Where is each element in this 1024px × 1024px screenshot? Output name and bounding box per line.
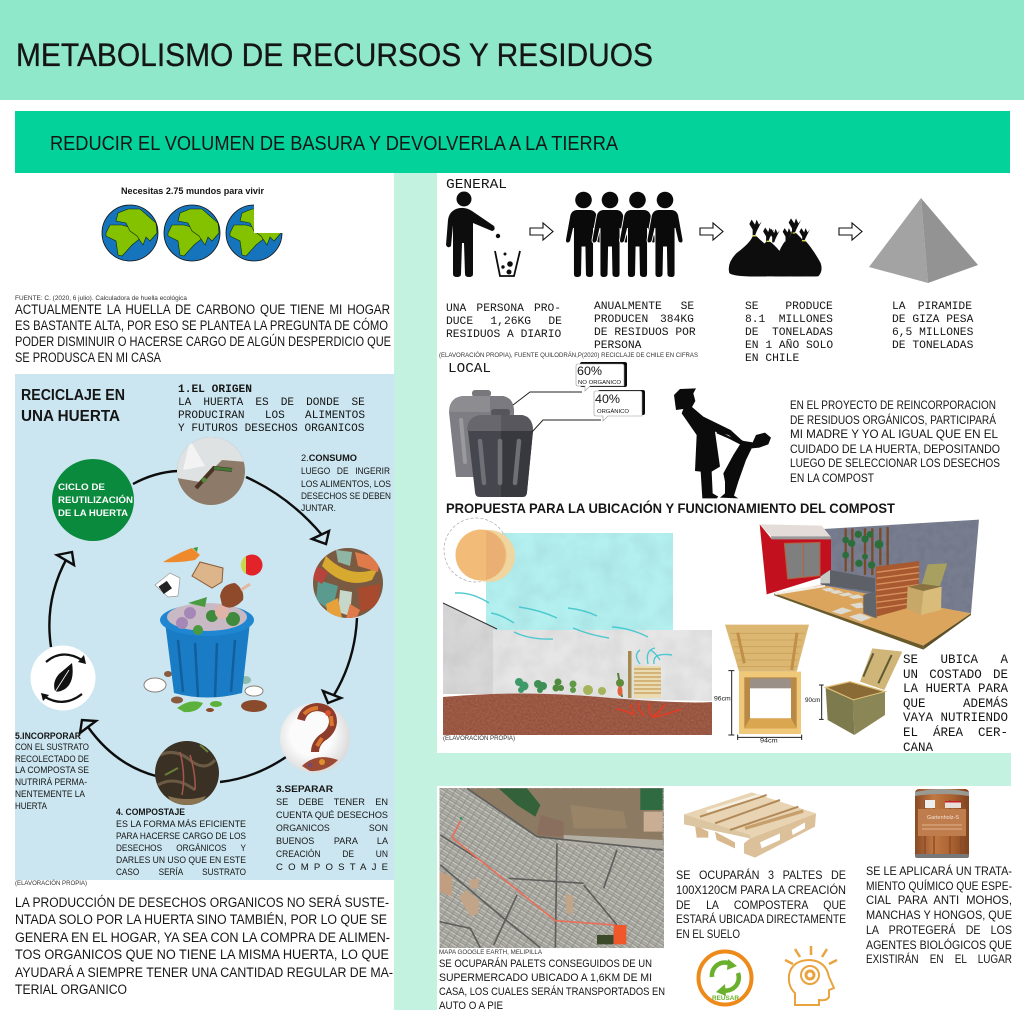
production paragraph: LA PRODUCCIÓN DE DESECHOS ORGANICOS NO SERÁ SUSTE- — [15, 894, 389, 911]
section: propuesta compost — [443, 499, 1009, 755]
icon: person throwing trash — [446, 192, 520, 277]
footprint paragraph: SE PRODUSCA EN MI CASA — [15, 350, 161, 365]
compost box front view — [714, 625, 809, 745]
fact 3 text: EN 1 AÑO SOLO — [745, 339, 833, 352]
cycle connector lines — [49, 471, 357, 782]
step 4 text: ES LA FORMA MÁS EFICIENTE — [116, 819, 246, 830]
step 3 text: 3.SEPARAR — [276, 784, 333, 795]
location text: CANA — [903, 741, 934, 755]
icon: trash cans — [449, 390, 533, 497]
local paragraph — [790, 398, 1000, 485]
step 4 text: DARLES UN USO QUE EN ESTE — [116, 855, 246, 866]
icon: wood treatment can: Gartenholz-S — [927, 815, 959, 821]
fact 3 text: EN CHILE — [745, 353, 799, 365]
air flow strokes — [455, 593, 672, 664]
title: METABOLISMO DE RECURSOS Y RESIDUOS — [16, 37, 653, 73]
production paragraph — [15, 894, 393, 998]
map caption: MAPA GOOGLE EARTH, MELIPILLA — [439, 949, 543, 956]
section: general — [439, 177, 978, 365]
callout: 40 percent: ORGÁNICO — [597, 408, 630, 415]
cycle arrowheads — [57, 531, 341, 733]
location text: LA HUERTA PARA — [903, 682, 1009, 696]
wood fence — [876, 561, 919, 617]
fact 4 text: DE TONELADAS — [892, 340, 974, 352]
icon: four people — [566, 192, 683, 278]
step 1 text: 1.EL ORIGEN — [178, 384, 252, 396]
fact 4 text: LA PIRAMIDE — [892, 301, 972, 313]
subtitle: REDUCIR EL VOLUMEN DE BASURA Y DEVOLVERLA A LA TIERRA — [50, 132, 618, 155]
callout: 60 percent — [576, 362, 627, 391]
source note: section drawing: (ELAVORACIÓN PROPIA) — [443, 735, 515, 742]
local heading: LOCAL — [448, 361, 491, 377]
panel: reciclaje en una huerta — [15, 374, 394, 880]
step 1 text: PRODUCIRAN LOS ALIMENTOS — [178, 410, 365, 422]
fact 1 text: RESIDUOS A DIARIO — [446, 329, 561, 341]
step 3 text: CREACIÓN DE UN — [276, 849, 388, 860]
delivery route — [452, 821, 615, 925]
compost bin section — [628, 651, 661, 698]
production paragraph: NTADA SOLO POR LA HUERTA SINO TAMBIÉN, POR LO QUE SE — [15, 911, 387, 928]
aerial map — [440, 788, 664, 948]
height dimension: 96cm — [714, 695, 731, 702]
location text: QUE ADEMÁS — [903, 696, 1008, 711]
3d garden render — [760, 520, 979, 650]
transport text: SE OCUPARÁN PALETS CONSEGUIDOS DE UN — [439, 957, 652, 970]
treatment text: MANCHAS Y HONGOS, QUE — [866, 908, 1012, 922]
step 4 text — [116, 807, 247, 878]
location text — [903, 653, 1009, 755]
icon: garbage bags — [729, 218, 822, 277]
treatment text — [866, 864, 1012, 966]
icon: wooden pallet — [684, 792, 816, 858]
source note: general: (ELAVORACIÓN PROPIA), FUENTE QUILODRÁN,P(2020) RECICLAJE DE CHILE EN CIFRAS — [439, 352, 698, 359]
arrow — [530, 223, 553, 240]
step 1 photo: garden — [177, 437, 247, 507]
top band — [0, 0, 1024, 100]
destination plot — [614, 925, 626, 944]
compost box in render — [922, 563, 947, 586]
panel heading: RECICLAJE EN — [21, 387, 125, 404]
green cycle badge: DE LA HUERTA — [58, 508, 128, 519]
step 3 text: SE DEBE TENER EN — [276, 797, 388, 808]
step 3 text: COMPOSTAJE — [276, 862, 388, 873]
panel: footprint — [15, 185, 391, 365]
pallet text: DE LA COMPOSTERA QUE — [676, 899, 846, 912]
green cycle badge: CICLO DE — [58, 482, 106, 493]
local paragraph: MI MADRE Y YO AL IGUAL QUE EN EL — [790, 427, 998, 441]
step 5 text: NUTRIRÁ PERMA- — [15, 777, 87, 788]
bucket body — [165, 622, 250, 698]
step 4 text: DESECHOS ORGÁNICOS Y — [116, 843, 247, 854]
step 2 text: DESECHOS SE DEBEN — [301, 491, 391, 502]
step 3 text — [276, 784, 389, 873]
vertical garden — [842, 527, 888, 575]
step 3 text: BUENOS PARA LA — [276, 836, 389, 847]
callout: 60 percent: NO ORGANICO — [578, 380, 622, 386]
transport text: SUPERMERCADO UBICADO A 1,6KM DE MI — [439, 972, 652, 984]
source note: panel: (ELAVORACIÓN PROPIA) — [15, 880, 87, 887]
location text: SE UBICA A — [903, 653, 1009, 667]
fact 4 text: DE GIZA PESA — [892, 314, 974, 326]
mint column background — [394, 173, 437, 1010]
icon: reuse badge — [698, 952, 752, 1004]
location text: UN COSTADO DE — [903, 668, 1008, 682]
step 1 text: LA HUERTA ES DE DONDE SE — [178, 397, 365, 409]
transport text: CASA, LOS CUALES SERÁN TRANSPORTADOS EN — [439, 985, 665, 998]
step 3 text: CUENTA QUÉ DESECHOS — [276, 810, 388, 821]
step 1 text — [178, 384, 365, 435]
footprint heading: Necesitas 2.75 mundos para vivir — [121, 185, 264, 196]
step 5 text: 5.INCORPORAR — [15, 731, 81, 742]
step 2 text: LOS ALIMENTOS, LOS — [301, 479, 391, 490]
step 5 text — [15, 731, 89, 812]
fact 3 text: DE TONELADAS — [745, 327, 833, 339]
step 3 text: ORGANICOS SON — [276, 823, 388, 834]
pallet text: SE OCUPARÁN 3 PALTES DE — [676, 869, 846, 882]
subtitle band — [15, 111, 1010, 173]
step 5 text: HUERTA — [15, 801, 47, 812]
section: materials — [439, 788, 1012, 1012]
footprint paragraph: ACTUALMENTE LA HUELLA DE CARBONO QUE TIENE MI HOGAR — [15, 302, 390, 317]
width dimension: 94cm — [760, 738, 778, 745]
callout lines — [513, 392, 601, 432]
step 5 text: LA COMPOSTA SE — [15, 765, 89, 776]
fact 2 text: ANUALMENTE SE — [594, 301, 694, 313]
source note: FUENTE: C. (2020, 6 julio). Calculadora de huella ecológica — [15, 295, 188, 302]
location text: VAYA NUTRIENDO — [903, 711, 1008, 725]
callout: 60 percent: 60% — [577, 364, 602, 378]
footprint paragraph: PODER DISMINUIR O HACERSE CARGO DE ALGÚN DESPERDICIO QUE — [15, 334, 391, 349]
step 4 text: 4. COMPOSTAJE — [116, 807, 186, 818]
treatment text: AGENTES BIOLÓGICOS QUE — [866, 938, 1012, 952]
footprint paragraph — [15, 302, 391, 365]
fact 4 text: 6,5 MILLONES — [892, 327, 974, 339]
step 5 text: NENTEMENTE LA — [15, 789, 86, 800]
fact 4 text — [892, 301, 974, 352]
step 2 text: JUNTAR. — [301, 503, 336, 514]
arrow — [839, 223, 862, 240]
fact 2 text: PRODUCEN 384KG — [594, 314, 694, 326]
step 2 photo: food waste — [312, 547, 384, 619]
panel heading — [21, 387, 125, 425]
pallet text: EN EL SUELO — [676, 928, 740, 941]
step 2 text: LUEGO DE INGERIR — [301, 466, 390, 477]
fact 2 text: PERSONA — [594, 340, 642, 352]
production paragraph: TERIAL ORGANICO — [15, 982, 127, 998]
icon: globes — [102, 205, 282, 261]
step 1 text: Y FUTUROS DESECHOS ORGANICOS — [178, 423, 365, 435]
step 5 icon: leaf with recycling arrows — [30, 646, 96, 710]
fact 1 text: UNA PERSONA PRO- — [446, 303, 561, 315]
green cycle badge: REUTILIZACIÓN — [58, 494, 133, 506]
footprint paragraph: ES BASTANTE ALTA, POR ESO SE PLANTEA LA PREGUNTA DE CÓMO — [15, 318, 388, 333]
step 2 text — [301, 453, 391, 514]
section: local — [448, 361, 1000, 498]
treatment text: LA PROTEGERÁ DE LOS — [866, 923, 1012, 937]
icon: wood treatment can — [915, 789, 969, 858]
paving stones — [822, 588, 872, 622]
treatment text: CIAL PARA ANTI MOHOS, — [866, 893, 1012, 907]
step 4 photo: compost with worms — [155, 741, 219, 805]
callout: 40 percent: 40% — [595, 392, 620, 406]
section heading: PROPUESTA PARA LA UBICACIÓN Y FUNCIONAMIENTO DEL COMPOST — [446, 499, 895, 516]
arrow — [700, 223, 723, 240]
icon: mother and child silhouette — [674, 388, 771, 498]
green cycle badge — [52, 459, 134, 541]
panel heading: UNA HUERTA — [21, 408, 120, 425]
local paragraph: EN LA COMPOST — [790, 471, 874, 485]
food items — [155, 547, 262, 608]
plants — [515, 673, 624, 697]
pallet text — [676, 869, 846, 941]
transport text — [439, 957, 665, 1012]
fact 3 text: SE PRODUCE — [745, 301, 833, 313]
icon: head with idea — [785, 946, 837, 1005]
step 3 image: question mark of waste — [280, 703, 350, 773]
step 4 text: CASO SERÍA SUSTRATO — [116, 867, 246, 878]
production paragraph: AYUDARÁ A SIEMPRE TENER UNA CANTIDAD REGULAR DE MA- — [15, 964, 393, 981]
fact 1 text — [446, 303, 562, 341]
mint horizontal band — [394, 753, 1011, 786]
height dimension: 90cm — [805, 697, 820, 704]
production paragraph: TOS ORGANICOS QUE NO TIENE LA MISMA HUERTA, LO QUE — [15, 947, 389, 963]
nutrient flow arrows — [616, 702, 681, 717]
pallet text: ESTARÁ UBICADA DIRECTAMENTE — [676, 913, 846, 926]
fact 3 text: 8.1 MILLONES — [745, 314, 833, 326]
icon: reuse badge: REUSAR — [712, 995, 739, 1002]
production paragraph: GENERA EN EL HOGAR, YA SEA CON LA COMPRA DE ALIMEN- — [15, 930, 390, 946]
fact 3 text — [745, 301, 833, 365]
fact 1 text: DUCE 1,26KG DE — [446, 316, 562, 328]
compost box perspective view — [805, 648, 902, 735]
icon: pyramid — [869, 198, 978, 283]
transport text: AUTO O A PIE — [439, 1000, 503, 1012]
scattered waste — [144, 671, 267, 712]
central illustration: organic waste bucket — [144, 547, 267, 712]
step 5 text: CON EL SUSTRATO — [15, 742, 89, 753]
general heading: GENERAL — [446, 177, 507, 193]
pallet text: 100X120CM PARA LA CREACIÓN — [676, 884, 846, 897]
site section drawing — [443, 518, 712, 735]
step 4 text: PARA HACERSE CARGO DE LOS — [116, 831, 246, 842]
treatment text: SE LE APLICARÁ UN TRATA- — [866, 864, 1012, 878]
callout: 40 percent — [594, 390, 645, 421]
step 2 text: 2.CONSUMO — [301, 453, 358, 464]
fact 2 text: DE RESIDUOS POR — [594, 327, 696, 339]
fact 2 text — [594, 301, 696, 352]
step 5 text: RECOLECTADO DE — [15, 754, 89, 765]
location text: EL ÁREA CER- — [903, 725, 1008, 740]
